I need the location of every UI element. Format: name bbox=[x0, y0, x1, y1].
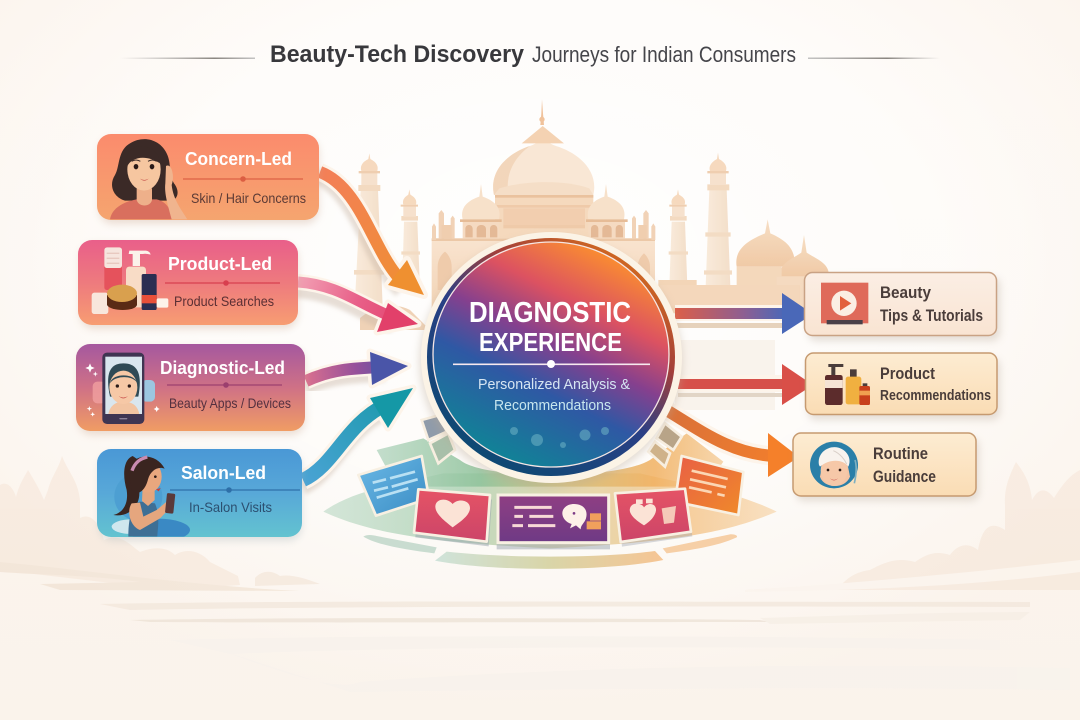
panel: routine guidance bbox=[793, 433, 979, 501]
heading: Product-Led bbox=[168, 254, 272, 274]
hub heading: EXPERIENCE bbox=[479, 327, 622, 357]
main building bbox=[432, 238, 655, 312]
lower strip right bbox=[663, 534, 737, 553]
side domes bbox=[460, 184, 628, 239]
subtext: Product Searches bbox=[174, 293, 274, 309]
label: Beauty bbox=[880, 283, 931, 302]
label bbox=[880, 283, 983, 325]
far left minaret bbox=[354, 153, 384, 307]
label: Guidance bbox=[873, 467, 936, 486]
hub heading: DIAGNOSTIC bbox=[469, 297, 631, 329]
label: Product bbox=[880, 364, 935, 383]
lens base bbox=[323, 473, 777, 548]
panel: concern-led bbox=[97, 134, 319, 224]
icon: bottles bbox=[825, 364, 870, 405]
panel: product recommendations bbox=[806, 353, 1000, 420]
hub divider bbox=[453, 360, 650, 368]
icon: video play bbox=[821, 283, 868, 324]
divider bbox=[167, 382, 282, 388]
label bbox=[873, 444, 936, 486]
label: Recommendations bbox=[880, 387, 991, 404]
card: heart bbox=[414, 489, 492, 546]
icon: cosmetic products bbox=[92, 247, 168, 314]
heading: Salon-Led bbox=[181, 463, 266, 483]
arrow: product to hub bbox=[296, 282, 418, 332]
label: Tips & Tutorials bbox=[880, 306, 983, 325]
lower strip left bbox=[363, 535, 437, 553]
icon: phone face scan bbox=[85, 353, 160, 424]
right outer domes bbox=[736, 219, 794, 267]
lower strip centre bbox=[435, 551, 663, 569]
panel: salon-led bbox=[97, 449, 302, 541]
fan base under hub bbox=[323, 415, 777, 569]
arrow: salon to hub bbox=[303, 388, 413, 488]
left landscape silhouette bbox=[0, 456, 320, 591]
hub subtitle: Personalized Analysis & bbox=[478, 376, 630, 393]
hub subtitle: Recommendations bbox=[494, 397, 611, 414]
icon: woman with towel turban bbox=[810, 442, 858, 488]
water reflection strips bbox=[100, 602, 1070, 692]
right minarets bbox=[669, 153, 732, 295]
panel: product-led bbox=[78, 240, 298, 329]
fan left panes bbox=[422, 415, 455, 463]
second left minaret bbox=[401, 189, 420, 290]
card: orange notes bbox=[675, 456, 743, 515]
subtext: Skin / Hair Concerns bbox=[191, 190, 306, 206]
main dome bbox=[493, 135, 594, 195]
card: heart and gift bbox=[615, 489, 692, 547]
side turrets bbox=[432, 210, 655, 240]
title: Beauty-Tech Discovery bbox=[270, 41, 525, 68]
hub subtitle bbox=[478, 376, 630, 414]
arrow: hub to routine bbox=[663, 408, 799, 477]
arrow: hub to recommendations bbox=[678, 364, 813, 405]
icon: woman with phone bbox=[112, 456, 190, 541]
lower buildings behind arrows bbox=[360, 285, 800, 410]
heading: Diagnostic-Led bbox=[160, 358, 285, 378]
fan wedge bbox=[377, 433, 723, 487]
title bbox=[270, 41, 796, 68]
divider bbox=[170, 487, 300, 493]
label bbox=[880, 364, 991, 404]
central hub bbox=[419, 232, 683, 488]
divider bbox=[165, 280, 280, 286]
card: chat bbox=[497, 495, 610, 549]
drum bbox=[495, 195, 593, 238]
icon: woman touching hair bbox=[110, 139, 187, 219]
divider bbox=[183, 176, 303, 182]
right landscape silhouette bbox=[745, 462, 1080, 592]
fan right panes bbox=[648, 423, 682, 467]
card: blue notes bbox=[358, 456, 429, 516]
Taj Mahal backdrop bbox=[354, 99, 833, 313]
title: Journeys for Indian Consumers bbox=[532, 42, 796, 67]
label: Routine bbox=[873, 444, 928, 463]
subtext: Beauty Apps / Devices bbox=[169, 395, 291, 411]
arrow: hub to tips bbox=[675, 293, 813, 334]
panel: beauty tips bbox=[804, 272, 1000, 341]
panel: diagnostic-led bbox=[76, 344, 305, 435]
arrow: diagnostic to hub bbox=[306, 352, 408, 388]
hub sparkles bbox=[510, 427, 609, 448]
subtext: In-Salon Visits bbox=[189, 499, 272, 515]
arrow: concern to hub bbox=[316, 172, 424, 295]
hub heading bbox=[469, 297, 631, 357]
heading: Concern-Led bbox=[185, 149, 292, 169]
